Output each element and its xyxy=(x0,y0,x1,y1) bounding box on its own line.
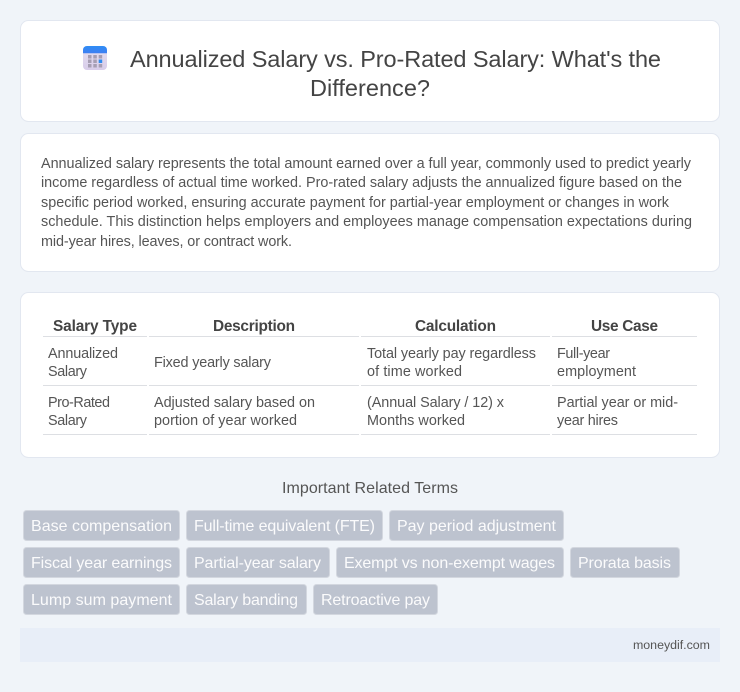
table row: annualized salary: Total yearly pay regardless xyxy=(367,346,536,362)
table row: pro-rated salary: (Annual Salary / 12) x xyxy=(367,395,505,411)
chip: base compensation xyxy=(24,510,180,540)
table header row: Salary Type xyxy=(53,318,137,335)
chip: fiscal year earnings: Fiscal year earnings xyxy=(31,555,172,572)
table row: annualized salary: Fixed yearly salary xyxy=(154,355,272,371)
text block: summary paragraph: mid-year hires, leaves, or contract work. xyxy=(41,234,292,250)
chip: partial-year salary: Partial-year salary xyxy=(194,555,321,572)
table header row: Calculation xyxy=(415,318,496,335)
chip: salary banding: Salary banding xyxy=(194,592,298,609)
chip: exempt vs non-exempt wages: Exempt vs non-exempt wages xyxy=(344,555,555,572)
table row: pro-rated salary: Pro-Rated xyxy=(48,395,110,411)
heading: important related terms: Important Related Terms xyxy=(282,480,458,497)
text block: summary paragraph: income regardless of actual time worked. Pro-rated salary adjusts the annualized figure based on the xyxy=(41,175,682,191)
chip: full-time equivalent: Full-time equivalent (FTE) xyxy=(194,518,375,535)
chip: pay period adjustment xyxy=(390,510,564,540)
table row: pro-rated salary: Adjusted salary based on xyxy=(154,395,315,411)
footer xyxy=(20,628,720,662)
table row: pro-rated salary xyxy=(48,395,678,429)
chip: prorata basis xyxy=(570,548,680,578)
panel: summary text xyxy=(20,134,720,272)
table row: pro-rated salary: portion of year worked xyxy=(154,413,297,429)
table row: annualized salary: employment xyxy=(557,364,636,380)
table header row xyxy=(53,318,658,335)
chip: lump sum payment: Lump sum payment xyxy=(31,592,173,609)
table row: pro-rated salary: Salary xyxy=(48,413,88,429)
table row: annualized salary: Salary xyxy=(48,364,88,380)
text block: summary paragraph: schedule. This distinction helps employers and employees manage compensation expectations during xyxy=(41,214,692,230)
chip: retroactive pay: Retroactive pay xyxy=(321,592,430,609)
chip: exempt vs non-exempt wages xyxy=(336,548,564,578)
table row: pro-rated salary: Months worked xyxy=(367,413,465,429)
table row: annualized salary xyxy=(48,346,636,380)
table row: annualized salary: Annualized xyxy=(48,346,118,362)
chip: pay period adjustment: Pay period adjustment xyxy=(397,518,557,535)
related term chips xyxy=(24,510,680,614)
chip: lump sum payment xyxy=(24,584,180,614)
icon: calendar xyxy=(83,46,107,70)
table row: pro-rated salary: Partial year or mid- xyxy=(557,395,678,411)
panel: comparison table xyxy=(20,292,720,458)
chip: salary banding xyxy=(186,584,306,614)
table header row: Description xyxy=(213,318,295,335)
chip: fiscal year earnings xyxy=(24,548,180,578)
chip: prorata basis: Prorata basis xyxy=(578,555,671,572)
table row: annualized salary: of time worked xyxy=(367,364,462,380)
chip: base compensation: Base compensation xyxy=(31,518,172,535)
chip: partial-year salary xyxy=(186,548,330,578)
table row: pro-rated salary: year hires xyxy=(557,413,618,429)
title: Annualized Salary vs. Pro-Rated Salary: What's the xyxy=(130,46,661,72)
title: Difference? xyxy=(310,75,430,101)
text block: summary paragraph xyxy=(41,156,692,250)
chip: full-time equivalent xyxy=(186,510,382,540)
panel: title header xyxy=(20,20,720,122)
text block: summary paragraph: Annualized salary represents the total amount earned over a full year, commonly used to predict yearly xyxy=(41,156,692,172)
footer: moneydif.com xyxy=(633,638,710,652)
text block: summary paragraph: specific period worked, ensuring accurate payment for partial-year employment or changes in work xyxy=(41,195,670,211)
table row: annualized salary: Full-year xyxy=(557,346,610,362)
title xyxy=(130,46,661,101)
chip: retroactive pay xyxy=(314,584,438,614)
table header row: Use Case xyxy=(591,318,658,335)
